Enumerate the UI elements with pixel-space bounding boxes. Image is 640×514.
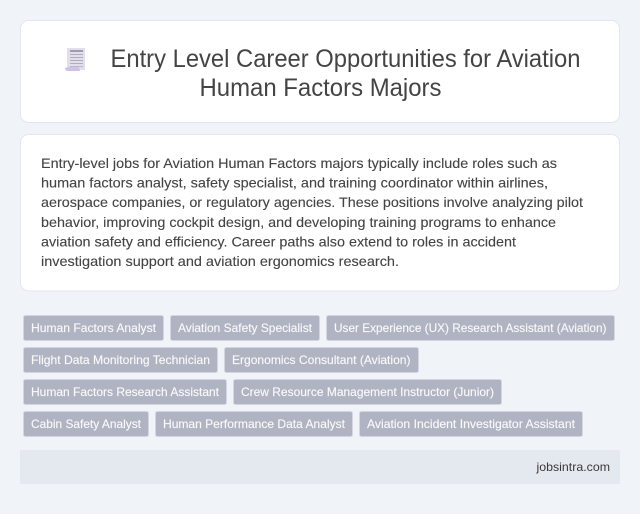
tag: Crew Resource Management Instructor: Crew Resource Management Instructor (Junior) xyxy=(241,385,494,399)
tag: Flight Data Monitoring Technician xyxy=(24,348,218,372)
tag: Aviation Safety Specialist: Aviation Safety Specialist xyxy=(178,321,313,335)
tag: Cabin Safety Analyst: Cabin Safety Analyst xyxy=(31,417,142,431)
footer bar xyxy=(20,450,620,484)
tag: Human Performance Data Analyst: Human Performance Data Analyst xyxy=(163,417,346,431)
tag: Ergonomics Consultant: Ergonomics Consultant (Aviation) xyxy=(232,353,410,367)
description text: aerospace companies, or regulatory agencies. These positions involve analyzing pilot xyxy=(41,194,583,210)
tag: Ergonomics Consultant xyxy=(224,348,418,372)
tag: Cabin Safety Analyst xyxy=(24,412,148,436)
tag: Aviation Incident Investigator Assistant xyxy=(360,412,582,436)
tag: Human Factors Research Assistant: Human Factors Research Assistant xyxy=(31,385,220,399)
tag: Human Factors Research Assistant xyxy=(24,380,226,404)
description text: behavior, improving cockpit design, and developing training programs to enhance xyxy=(41,214,556,230)
footer source text: jobsintra.com xyxy=(535,460,610,474)
tag: Human Factors Analyst: Human Factors Analyst xyxy=(31,321,157,335)
tag: Flight Data Monitoring Technician: Flight Data Monitoring Technician xyxy=(31,353,210,367)
description text: Entry-level jobs for Aviation Human Factors majors typically include roles such as xyxy=(41,155,557,171)
panel: title card xyxy=(20,20,620,122)
title xyxy=(110,45,580,102)
panel: description xyxy=(20,134,620,291)
title: Human Factors Majors xyxy=(200,74,442,102)
tag: Crew Resource Management Instructor xyxy=(234,380,502,404)
tag: User Experience Research Assistant: User Experience (UX) Research Assistant (Aviation) xyxy=(334,321,606,335)
tag: Aviation Safety Specialist xyxy=(170,316,320,340)
title: Entry Level Career Opportunities for Aviation xyxy=(110,45,580,73)
description text xyxy=(41,155,583,269)
description text: aviation safety and efficiency. Career paths also extend to roles in accident xyxy=(41,233,516,249)
tag: User Experience Research Assistant xyxy=(326,316,614,340)
tag: Human Factors Analyst xyxy=(24,316,164,340)
tag: Human Performance Data Analyst xyxy=(156,412,352,436)
tag list xyxy=(24,316,614,436)
description text: investigation support and aviation ergonomics research. xyxy=(41,253,399,269)
icon: paper scroll xyxy=(65,48,85,71)
description text: human factors analyst, safety specialist, and training coordinator within airlines, xyxy=(41,175,548,191)
tag: Aviation Incident Investigator Assistant: Aviation Incident Investigator Assistant xyxy=(367,417,576,431)
